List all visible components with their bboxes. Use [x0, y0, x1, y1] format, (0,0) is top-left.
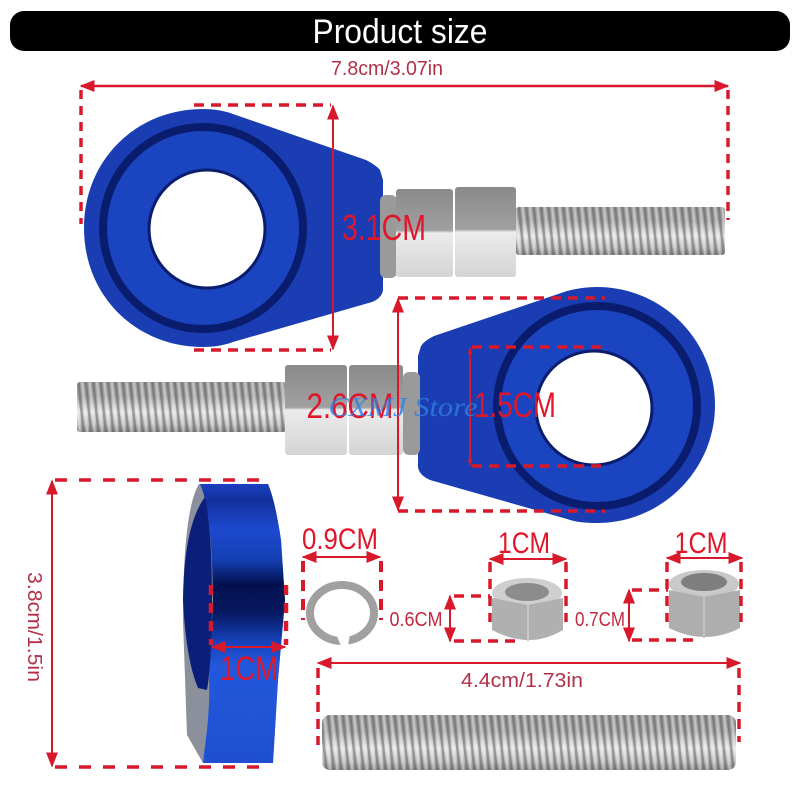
dimension: height 3.8cm	[23, 480, 262, 767]
dimension: right nut 1CM and 0.7CM: 0.7CM	[575, 609, 625, 631]
dimension: overall length 7.8cm: 7.8cm/3.07in	[331, 58, 443, 80]
bolt assembly: lower	[77, 365, 420, 455]
dimension: washer 0.9CM: 0.9CM	[302, 523, 378, 556]
dimension: ring width 1CM	[211, 585, 286, 688]
dimension: left nut 1CM and 0.6CM: 0.6CM	[390, 609, 442, 631]
dimension: 2.6CM: 2.6CM	[306, 387, 394, 426]
hex nut: left	[492, 578, 563, 641]
long threaded rod	[322, 715, 736, 770]
dimension: washer 0.9CM	[302, 523, 381, 620]
title bar	[10, 11, 790, 51]
watermark: CXMJ Store	[328, 392, 478, 422]
dimension: 3.1CM	[194, 105, 426, 350]
dimension: left nut 1CM and 0.6CM	[390, 527, 566, 641]
spring lock washer	[310, 585, 374, 648]
dimension: left nut 1CM and 0.6CM: 1CM	[498, 527, 550, 560]
title bar: Product size	[312, 13, 488, 51]
dimension: overall length 7.8cm	[81, 58, 728, 224]
dimension: right nut 1CM and 0.7CM	[575, 527, 742, 641]
dimension: 1.5CM: 1.5CM	[474, 386, 556, 425]
blue chain adjuster: upper	[84, 109, 383, 347]
dimension: ring width 1CM: 1CM	[220, 650, 278, 688]
hex nut: right	[669, 570, 740, 638]
dimension: rod length 4.4cm: 4.4cm/1.73in	[461, 670, 583, 692]
dimension: rod length 4.4cm	[318, 663, 740, 745]
dimension: 3.1CM: 3.1CM	[342, 207, 426, 248]
dimension: height 3.8cm: 3.8cm/1.5in	[23, 572, 45, 682]
blue chain adjuster: lower	[418, 287, 715, 523]
dimension: 2.6CM	[306, 298, 605, 511]
dimension: 1.5CM	[470, 347, 605, 466]
blue adjuster side view	[183, 484, 285, 763]
dimension: right nut 1CM and 0.7CM: 1CM	[674, 527, 728, 560]
bolt assembly: upper	[380, 187, 725, 278]
